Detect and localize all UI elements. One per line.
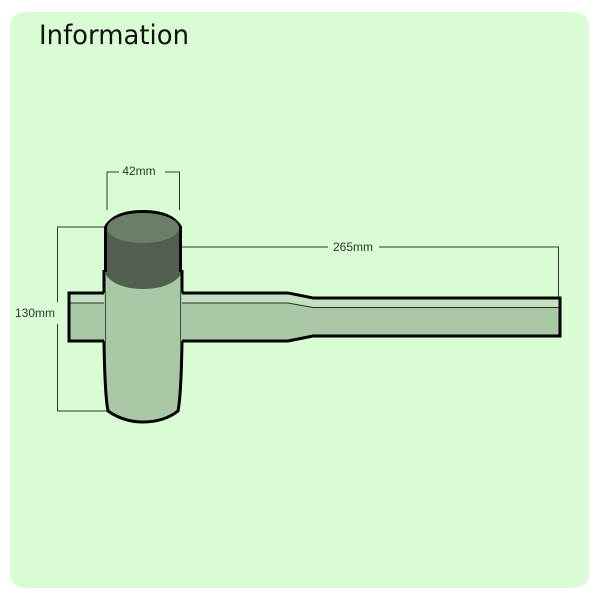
hammer diagram <box>69 212 560 422</box>
handle <box>69 293 560 341</box>
dark cap <box>106 212 180 289</box>
dimension: 42mm <box>107 164 180 210</box>
dimension: 130mm <box>15 227 108 411</box>
hammer head body <box>104 270 182 422</box>
title: Information <box>39 20 189 51</box>
dimension: 265mm: 265mm <box>333 240 373 254</box>
dimension: 130mm: 130mm <box>15 306 55 320</box>
dimension: 265mm <box>182 240 558 297</box>
dimension: 42mm: 42mm <box>122 164 156 178</box>
